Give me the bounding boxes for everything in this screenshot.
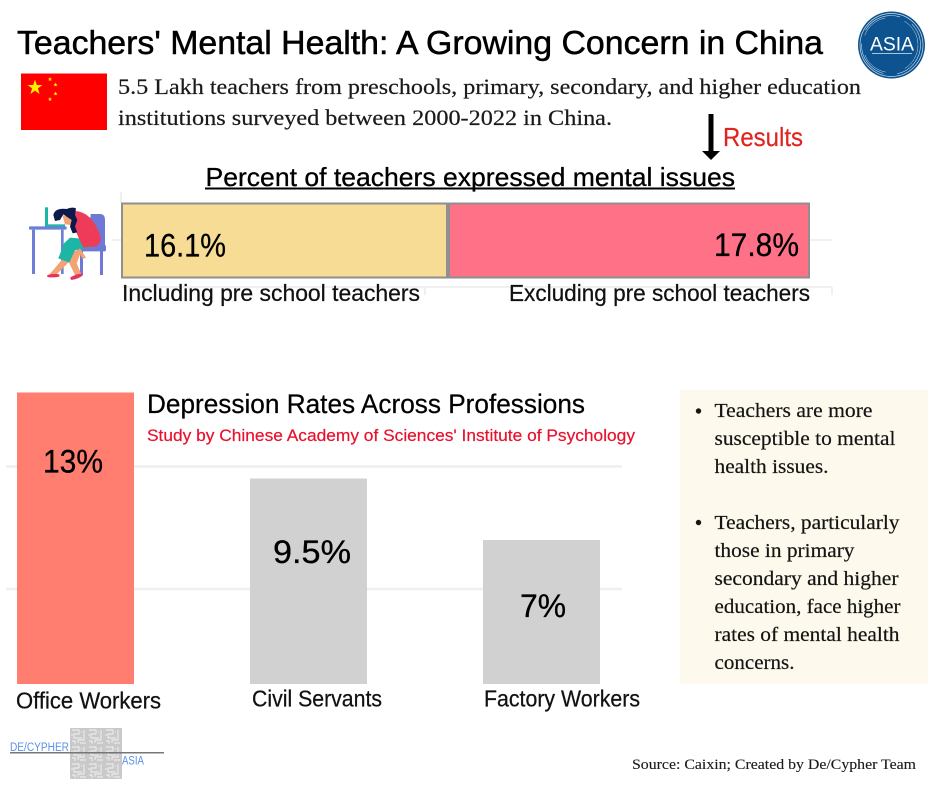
bar chart: depression rates: [6, 392, 640, 714]
logo: De/Cypher Asia: DE/CYPHER: [10, 742, 69, 754]
bullet: teachers more susceptible: [696, 400, 896, 478]
bullet: higher rates: those in primary: [714, 540, 855, 562]
logo: De/Cypher Asia: [10, 728, 164, 779]
bullet: teachers more susceptible: Teachers are more: [714, 400, 872, 422]
bullet: higher rates: [696, 512, 901, 674]
intro text: institutions surveyed between 2000-2022 in China.: [118, 105, 612, 130]
icon: China flag: [21, 74, 107, 130]
icon: exhausted teacher at desk: [29, 207, 106, 280]
arrow: down to results: [702, 114, 720, 160]
value: 17.8%: 17.8%: [714, 227, 799, 263]
icon: ASIA logo: ASIA: [870, 34, 914, 56]
bullet: higher rates: rates of mental health: [714, 624, 900, 646]
bullet: higher rates: concerns.: [714, 652, 794, 674]
bar: factory workers: [483, 540, 600, 684]
label: factory workers: Factory Workers: [484, 686, 640, 712]
bar: civil servants: [250, 478, 367, 684]
value: 9.5%: 9.5%: [273, 534, 351, 570]
panel: percent stacked bar: [112, 192, 832, 306]
source note: Source: Caixin; Created by De/Cypher Team: [632, 757, 917, 773]
label: including: Including pre school teachers: [122, 280, 420, 306]
bullet: teachers more susceptible: health issues.: [714, 456, 828, 478]
panel: key takeaways: [680, 390, 928, 684]
bar: excluding pre school teachers: [449, 204, 809, 278]
intro text: 5.5 Lakh teachers from preschools, primary, secondary, and higher education: [118, 74, 861, 99]
title: Teachers' Mental Health: A Growing Concern in China: [17, 24, 824, 61]
value: 13%: 13%: [43, 444, 103, 480]
icon: ASIA logo: [858, 12, 925, 78]
subheading: study attribution: Study by Chinese Academy of Sciences' Institute of Psychology: [147, 426, 636, 445]
label: civil servants: Civil Servants: [252, 686, 382, 712]
heading: depression rates: Depression Rates Across Professions: [147, 389, 585, 419]
value: 16.1%: 16.1%: [144, 228, 226, 264]
bullet: teachers more susceptible: susceptible to mental: [714, 428, 896, 450]
bar: office workers: [17, 392, 134, 684]
logo: De/Cypher Asia: ASIA: [122, 756, 144, 768]
heading: percent of teachers: Percent of teachers expressed mental issues: [206, 162, 735, 192]
bullet: higher rates: secondary and higher: [714, 568, 899, 590]
bullet: higher rates: Teachers, particularly: [714, 512, 900, 534]
results label: Results: [723, 122, 803, 152]
label: excluding: Excluding pre school teachers: [509, 280, 810, 306]
bar: including pre school teachers: [122, 204, 447, 278]
intro text: [118, 74, 861, 130]
label: office workers: Office Workers: [16, 688, 161, 714]
bullet: higher rates: education, face higher: [714, 596, 901, 618]
value: 7%: 7%: [520, 588, 566, 624]
